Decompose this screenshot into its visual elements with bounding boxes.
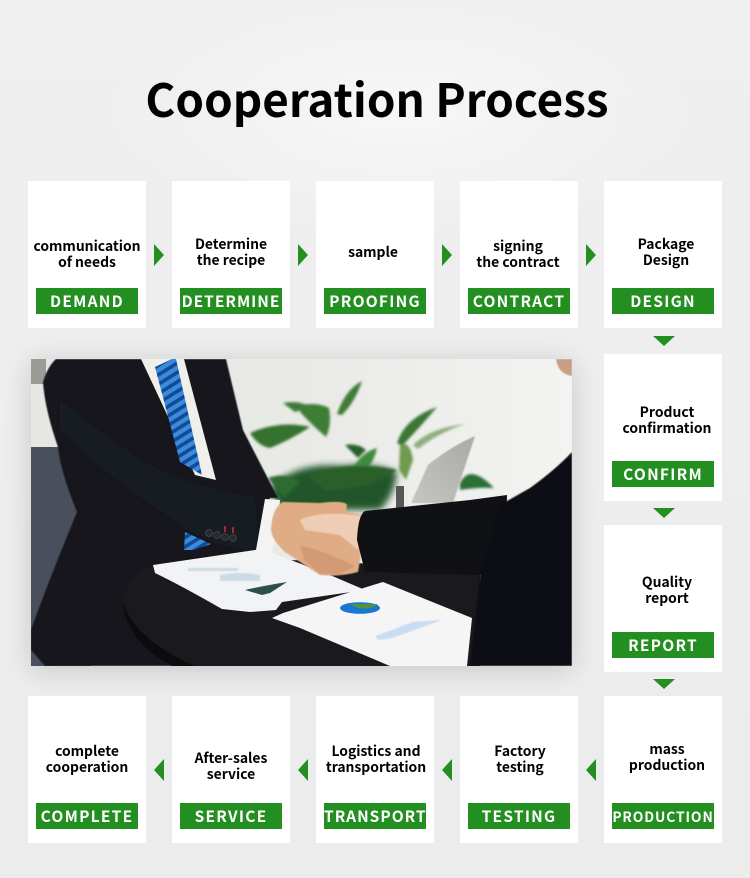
card: confirm: Product bbox=[640, 402, 694, 422]
card: complete: cooperation bbox=[46, 757, 128, 777]
card: design: Package bbox=[638, 234, 694, 254]
papers bbox=[153, 549, 365, 612]
arrow: left 4 bbox=[586, 759, 596, 781]
card: confirm bbox=[604, 354, 722, 501]
arrow: down 3 bbox=[653, 679, 675, 689]
arrow: left 2 bbox=[298, 759, 308, 781]
card: complete: COMPLETE bbox=[41, 805, 133, 827]
arrow: right 4 bbox=[586, 244, 596, 266]
arrow: right 1 bbox=[154, 244, 164, 266]
card: proofing: PROOFING bbox=[329, 290, 421, 312]
card: service bbox=[172, 696, 290, 843]
card: production: mass bbox=[649, 739, 685, 759]
pen bbox=[396, 486, 404, 508]
sleeve highlight bbox=[254, 498, 255, 499]
laptop bbox=[411, 436, 475, 503]
card: transport: TRANSPORT bbox=[324, 805, 426, 827]
card: confirm: CONFIRM bbox=[623, 463, 703, 485]
card: production bbox=[604, 696, 722, 843]
card: determine: the recipe bbox=[197, 250, 265, 270]
card: proofing: sample bbox=[348, 242, 398, 262]
card: determine: DETERMINE bbox=[182, 290, 280, 312]
card: design bbox=[604, 181, 722, 328]
card: design: Design bbox=[643, 250, 689, 270]
plant bbox=[250, 381, 494, 510]
jacket buttons bbox=[206, 530, 236, 541]
card: proofing bbox=[316, 181, 434, 328]
card: transport bbox=[316, 696, 434, 843]
card: production: production bbox=[629, 755, 705, 775]
arrow: right 3 bbox=[442, 244, 452, 266]
card: report bbox=[604, 525, 722, 672]
tie bbox=[155, 359, 202, 475]
table bbox=[171, 560, 480, 666]
card: design: DESIGN bbox=[630, 290, 696, 312]
card: contract: CONTRACT bbox=[473, 290, 565, 312]
arrow: left 1 bbox=[154, 759, 164, 781]
pie chart bbox=[340, 602, 380, 614]
card: contract bbox=[460, 181, 578, 328]
arrow: left 3 bbox=[442, 759, 452, 781]
card: complete bbox=[28, 696, 146, 843]
card: demand: DEMAND bbox=[50, 290, 124, 312]
head bbox=[556, 359, 572, 376]
title: Cooperation Process bbox=[145, 65, 609, 131]
right body bbox=[470, 452, 572, 666]
card: contract: signing bbox=[493, 236, 543, 256]
card: demand bbox=[28, 181, 146, 328]
card: confirm: confirmation bbox=[623, 418, 711, 438]
card: testing: Factory bbox=[494, 741, 546, 761]
shirt bbox=[141, 359, 216, 480]
card: transport: Logistics and bbox=[331, 741, 421, 761]
arrow: right 2 bbox=[298, 244, 308, 266]
card: report: Quality bbox=[642, 572, 692, 592]
yellow object bbox=[370, 572, 410, 584]
card: report: REPORT bbox=[628, 634, 698, 656]
card: testing: testing bbox=[496, 757, 544, 777]
photo: business handshake bbox=[31, 359, 572, 666]
card: service: After-sales bbox=[195, 748, 267, 768]
card: transport: transportation bbox=[326, 757, 426, 777]
card: service: SERVICE bbox=[195, 805, 267, 827]
hands bbox=[271, 502, 362, 576]
card: determine: Determine bbox=[195, 234, 267, 254]
photo shadow bbox=[31, 359, 572, 666]
card: production: PRODUCTION bbox=[612, 806, 714, 826]
card: complete: complete bbox=[55, 741, 119, 761]
right sleeve bbox=[357, 495, 507, 575]
arrow: down 1 bbox=[653, 336, 675, 346]
card: service: service bbox=[207, 764, 255, 784]
card: demand: communication bbox=[33, 236, 141, 256]
card: testing bbox=[460, 696, 578, 843]
card: determine bbox=[172, 181, 290, 328]
card: demand: of needs bbox=[58, 252, 116, 272]
card: report: report bbox=[645, 588, 689, 608]
arrow: down 2 bbox=[653, 508, 675, 518]
left jacket bbox=[31, 359, 278, 666]
card: contract: the contract bbox=[476, 252, 560, 272]
card: testing: TESTING bbox=[482, 805, 556, 827]
cuff bbox=[256, 499, 280, 552]
